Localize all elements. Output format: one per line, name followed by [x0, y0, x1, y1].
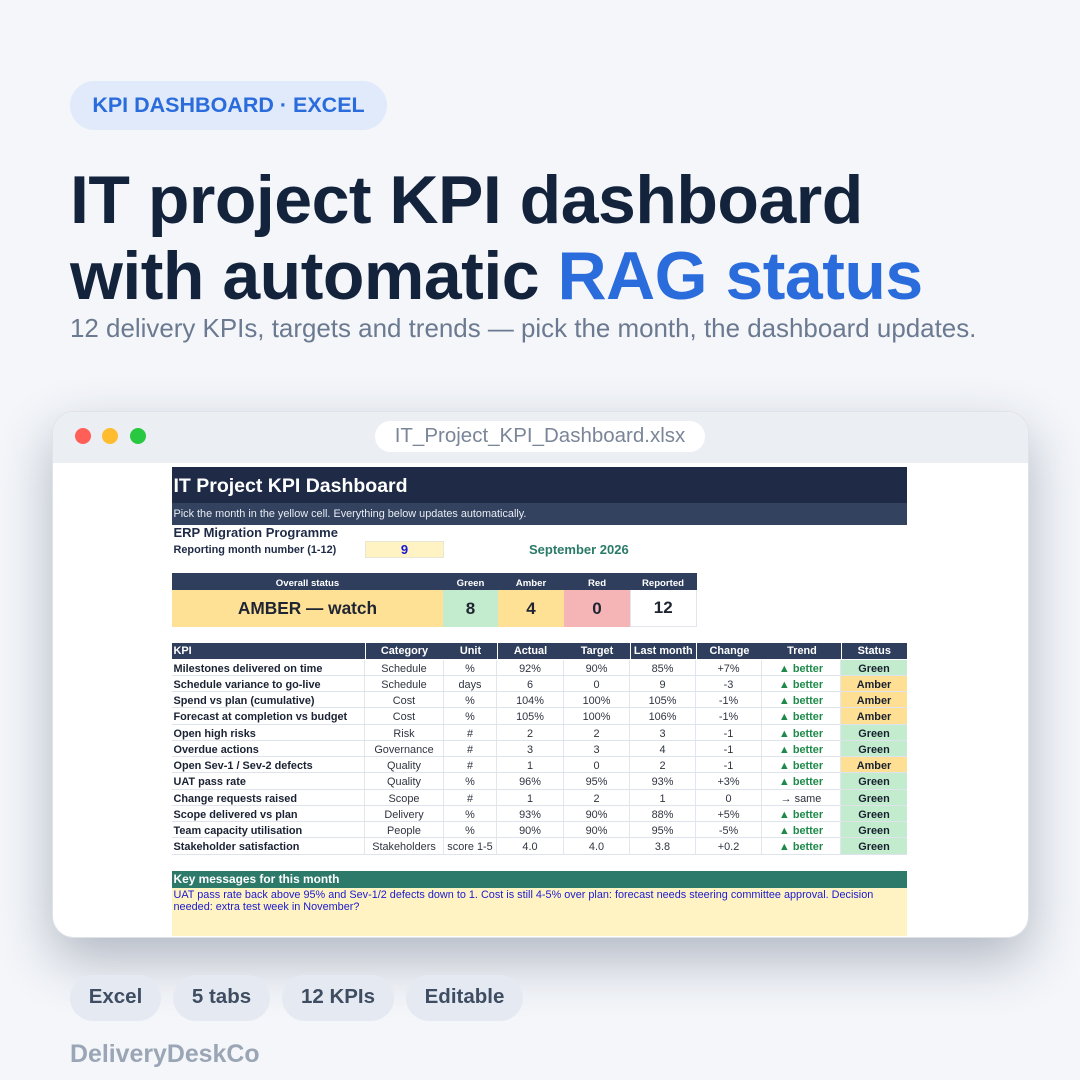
month name: September 2026: [529, 542, 629, 556]
KPI row: spend vs plan: 104%: [516, 695, 544, 707]
KPI row: team capacity: Team capacity utilisation: [174, 825, 302, 837]
KPI row: UAT pass rate: 93%: [652, 776, 673, 788]
KPI row: open high risks: Risk: [393, 728, 415, 740]
summary header row: Green: [457, 578, 484, 589]
month input cell: [365, 540, 444, 558]
KPI row: change requests: 1: [527, 793, 533, 805]
browser window: [52, 411, 1029, 938]
KPI row: change requests: → same: [781, 793, 821, 805]
KPI row: overdue actions: Governance: [374, 744, 434, 756]
KPI row: overdue actions: ▲ better: [779, 744, 823, 756]
KPI row: open high risks: ▲ better: [779, 728, 823, 740]
table header: Change: [710, 645, 749, 657]
green count: 8: [466, 599, 475, 618]
reported count: [630, 590, 696, 627]
month input cell: 9: [401, 542, 408, 556]
KPI row: spend vs plan: Amber: [857, 695, 891, 707]
KPI row: team capacity: -5%: [719, 825, 738, 837]
KPI row: schedule variance: 0: [593, 679, 600, 691]
table header: Status: [858, 645, 891, 657]
table header: [172, 643, 907, 659]
KPI row: change requests: 2: [593, 793, 600, 805]
KPI row: forecast at completion: Cost: [393, 711, 415, 723]
KPI row: open high risks: #: [467, 728, 473, 740]
KPI row: spend vs plan: [172, 692, 907, 708]
KPI row: schedule variance: ▲ better: [779, 679, 823, 691]
KPI row: open defects: 0: [593, 760, 600, 772]
KPI row: change requests: Green: [858, 793, 890, 805]
brand name: DeliveryDeskCo: [70, 1040, 260, 1068]
KPI row: forecast at completion: [172, 708, 907, 725]
KPI row: UAT pass rate: Green: [858, 776, 890, 788]
KPI row: forecast at completion: 106%: [649, 711, 676, 723]
KPI row: team capacity: 90%: [586, 825, 607, 837]
KPI row: team capacity: People: [387, 825, 421, 837]
file name tab: [375, 421, 705, 452]
reported count: 12: [654, 598, 673, 617]
KPI row: milestones: +7%: [717, 663, 740, 675]
window title bar: [53, 412, 1028, 463]
file name tab: IT_Project_KPI_Dashboard.xlsx: [395, 424, 685, 447]
KPI row: schedule variance: 9: [659, 679, 666, 691]
KPI row: scope delivered: Delivery: [384, 809, 424, 821]
table header: Unit: [460, 645, 481, 657]
KPI row: stakeholder satisfaction: Stakeholder satisfaction: [174, 841, 299, 853]
KPI row: open defects: Open Sev-1 / Sev-2 defects: [174, 760, 313, 772]
KPI row: overdue actions: 3: [527, 744, 533, 756]
KPI row: team capacity: 90%: [519, 825, 541, 837]
KPI row: scope delivered: %: [465, 809, 475, 821]
table header: Actual: [514, 645, 547, 657]
KPI row: schedule variance: [172, 676, 907, 692]
KPI row: change requests: 0: [725, 793, 732, 805]
title: IT project KPI dashboard: [70, 162, 863, 238]
KPI row: stakeholder satisfaction: [172, 838, 907, 855]
KPI row: overdue actions: -1: [724, 744, 733, 756]
green count: [443, 590, 498, 627]
KPI row: spend vs plan: ▲ better: [779, 695, 823, 707]
KPI row: overdue actions: 4: [659, 744, 666, 756]
close button: [75, 428, 91, 444]
KPI row: stakeholder satisfaction: +0.2: [718, 841, 739, 853]
KPI row: overdue actions: Overdue actions: [174, 744, 259, 756]
KPI row: scope delivered: 90%: [586, 809, 607, 821]
KPI row: scope delivered: 88%: [652, 809, 673, 821]
KPI row: stakeholder satisfaction: 4.0: [589, 841, 604, 853]
KPI row: milestones: [172, 660, 907, 676]
summary header row: [172, 573, 697, 590]
tag: 5 tabs: 5 tabs: [192, 985, 251, 1008]
amber count: 4: [526, 599, 536, 618]
red count: [564, 590, 630, 627]
summary header row: Amber: [516, 578, 546, 589]
KPI row: open high risks: Open high risks: [174, 728, 256, 740]
KPI row: open defects: #: [467, 760, 473, 772]
KPI row: spend vs plan: Spend vs plan (cumulative): [174, 695, 315, 707]
tag pill: KPI DASHBOARD · EXCEL: [92, 93, 365, 117]
KPI row: scope delivered: +5%: [717, 809, 740, 821]
KPI row: overdue actions: Green: [858, 744, 890, 756]
KPI row: forecast at completion: %: [465, 711, 475, 723]
sheet subtitle banner: Pick the month in the yellow cell. Everything below updates automatically.: [174, 508, 526, 520]
KPI row: open high risks: 3: [659, 728, 666, 740]
KPI row: change requests: 1: [659, 793, 666, 805]
key messages body: [172, 888, 907, 936]
summary header row: Reported: [642, 578, 684, 589]
KPI row: UAT pass rate: %: [465, 776, 475, 788]
KPI row: open defects: [172, 757, 907, 773]
KPI row: change requests: #: [467, 793, 473, 805]
KPI row: overdue actions: [172, 741, 907, 757]
KPI row: stakeholder satisfaction: Green: [858, 841, 890, 853]
KPI row: scope delivered: [172, 806, 907, 822]
overall status cell: [172, 590, 443, 627]
KPI row: open high risks: 2: [527, 728, 533, 740]
minimise button: [102, 428, 118, 444]
KPI row: team capacity: 95%: [652, 825, 673, 837]
summary panel: [172, 573, 697, 627]
KPI row: UAT pass rate: UAT pass rate: [174, 776, 246, 788]
summary header row: Red: [588, 578, 606, 589]
table header: Last month: [634, 645, 693, 657]
subtitle: 12 delivery KPIs, targets and trends — pick the month, the dashboard updates.: [70, 315, 976, 343]
KPI row: open defects: 2: [659, 760, 666, 772]
KPI row: change requests: Change requests raised: [174, 793, 297, 805]
KPI row: milestones: Milestones delivered on time: [174, 663, 322, 675]
KPI row: milestones: Schedule: [381, 663, 427, 675]
KPI row: open defects: Quality: [387, 760, 421, 772]
KPI row: milestones: 90%: [586, 663, 607, 675]
KPI row: schedule variance: Schedule variance to go-live: [174, 679, 321, 691]
KPI row: open high risks: [172, 725, 907, 741]
KPI row: overdue actions: 3: [593, 744, 600, 756]
KPI row: UAT pass rate: 96%: [519, 776, 541, 788]
month label: Reporting month number (1-12): [174, 544, 336, 556]
KPI row: schedule variance: days: [458, 679, 482, 691]
KPI row: open defects: ▲ better: [779, 760, 823, 772]
tag: 5 tabs: [173, 975, 270, 1021]
KPI row: overdue actions: #: [467, 744, 473, 756]
KPI row: milestones: 92%: [519, 663, 541, 675]
tag pill: [70, 81, 387, 130]
KPI row: stakeholder satisfaction: score 1-5: [447, 841, 493, 853]
KPI row: schedule variance: -3: [724, 679, 733, 691]
KPI row: open defects: 1: [527, 760, 533, 772]
KPI row: team capacity: [172, 822, 907, 838]
KPI row: open high risks: Green: [858, 728, 890, 740]
KPI row: scope delivered: Scope delivered vs plan: [174, 809, 298, 821]
KPI row: forecast at completion: Forecast at completion vs budget: [174, 711, 347, 723]
KPI row: schedule variance: Amber: [857, 679, 891, 691]
table header: Trend: [787, 645, 817, 657]
amber count: [498, 590, 564, 627]
KPI row: milestones: ▲ better: [779, 663, 823, 675]
KPI row: team capacity: Green: [858, 825, 890, 837]
KPI row: spend vs plan: 100%: [583, 695, 610, 707]
KPI row: stakeholder satisfaction: 4.0: [522, 841, 538, 853]
KPI row: milestones: %: [465, 663, 475, 675]
KPI row: open high risks: 2: [593, 728, 600, 740]
tag: Editable: [406, 975, 523, 1021]
KPI row: stakeholder satisfaction: Stakeholders: [372, 841, 436, 853]
KPI row: forecast at completion: Amber: [857, 711, 891, 723]
KPI row: forecast at completion: 100%: [583, 711, 610, 723]
sheet subtitle banner: [172, 503, 907, 525]
KPI row: change requests: [172, 790, 907, 806]
KPI row: stakeholder satisfaction: 3.8: [655, 841, 670, 853]
KPI row: spend vs plan: %: [465, 695, 475, 707]
tag: Excel: Excel: [89, 985, 142, 1008]
sheet title banner: [172, 467, 907, 503]
red count: 0: [592, 599, 602, 618]
KPI row: team capacity: %: [465, 825, 475, 837]
KPI row: forecast at completion: -1%: [719, 711, 738, 723]
key messages body: UAT pass rate back above 95% and Sev-1/2 defects down to 1. Cost is still 4-5% over plan: forecast needs steering committee approval. Decision: [174, 888, 873, 900]
KPI row: forecast at completion: 105%: [516, 711, 544, 723]
table header: KPI: [174, 645, 192, 657]
KPI row: UAT pass rate: 95%: [586, 776, 607, 788]
KPI row: milestones: Green: [858, 663, 890, 675]
summary header row: Overall status: [276, 578, 339, 589]
tag: 12 KPIs: [282, 975, 394, 1021]
KPI row: forecast at completion: ▲ better: [779, 711, 823, 723]
KPI row: open high risks: -1: [724, 728, 733, 740]
KPI row: UAT pass rate: ▲ better: [779, 776, 823, 788]
KPI row: UAT pass rate: Quality: [387, 776, 421, 788]
programme name: ERP Migration Programme: [174, 525, 338, 540]
KPI row: spend vs plan: Cost: [393, 695, 415, 707]
KPI row: schedule variance: 6: [527, 679, 533, 691]
KPI row: scope delivered: 93%: [519, 809, 541, 821]
title: [70, 162, 923, 314]
KPI row: spend vs plan: -1%: [719, 695, 738, 707]
KPI row: spend vs plan: 105%: [649, 695, 676, 707]
overall status cell: AMBER — watch: [238, 598, 377, 618]
KPI table: [172, 643, 907, 659]
maximise button: [130, 428, 146, 444]
title: with automatic RAG status: [70, 238, 923, 314]
KPI row: UAT pass rate: [172, 773, 907, 790]
table header: Target: [581, 645, 613, 657]
key messages header: Key messages for this month: [174, 872, 339, 886]
KPI row: change requests: Scope: [389, 793, 419, 805]
KPI row: scope delivered: Green: [858, 809, 890, 821]
KPI row: team capacity: ▲ better: [779, 825, 823, 837]
tag: Excel: [70, 975, 161, 1021]
key messages body: needed: extra test week in November?: [174, 901, 359, 913]
KPI row: stakeholder satisfaction: ▲ better: [779, 841, 823, 853]
sheet title banner: IT Project KPI Dashboard: [174, 475, 408, 497]
KPI row: milestones: 85%: [652, 663, 673, 675]
KPI row: UAT pass rate: +3%: [717, 776, 740, 788]
KPI row: open defects: Amber: [857, 760, 891, 772]
KPI row: open defects: -1: [724, 760, 733, 772]
table header: Category: [381, 645, 428, 657]
tag: 12 KPIs: 12 KPIs: [301, 985, 375, 1008]
tag: Editable: Editable: [425, 985, 504, 1008]
KPI row: scope delivered: ▲ better: [779, 809, 823, 821]
KPI row: schedule variance: Schedule: [381, 679, 427, 691]
key messages header: [172, 870, 907, 888]
